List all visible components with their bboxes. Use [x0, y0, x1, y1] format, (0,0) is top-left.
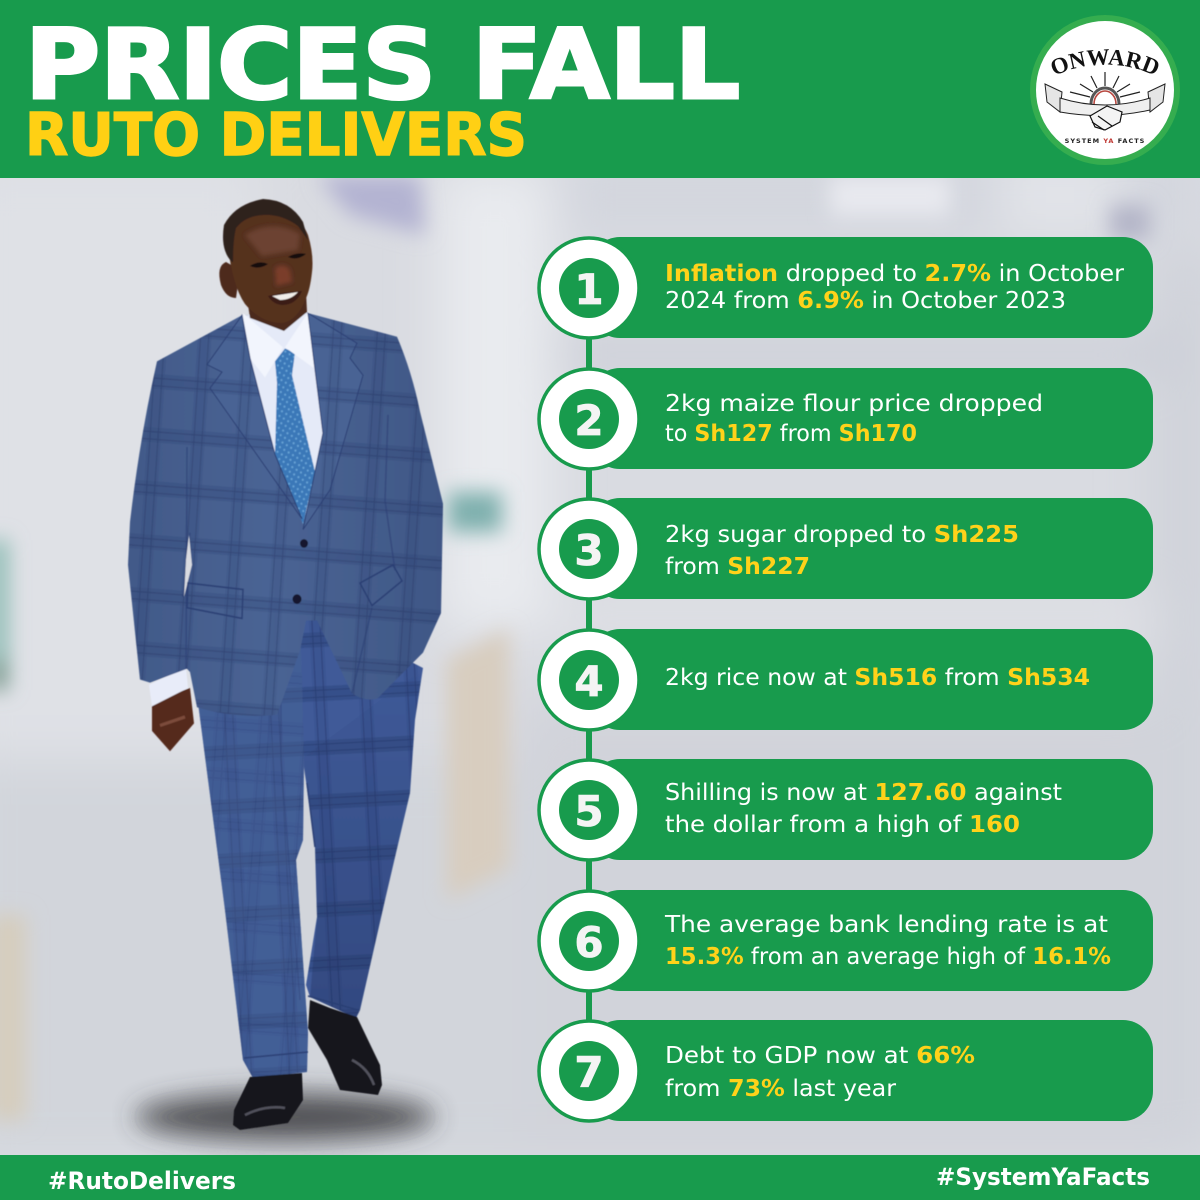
- item 2: maize flour: 2kg maize flour price dropped: [665, 389, 1043, 417]
- item 3: sugar: 2kg sugar dropped to Sh225: [665, 520, 1019, 548]
- eyes: [250, 253, 306, 268]
- ground shadow: [135, 1093, 435, 1141]
- collar: [243, 311, 315, 377]
- item 2: maize flour: to Sh127 from Sh170: [665, 419, 917, 447]
- back shoe: [308, 1000, 382, 1095]
- item 6: lending rate: [539, 890, 1153, 991]
- pocket flaps: [187, 565, 402, 618]
- item 4: rice: [539, 629, 1153, 730]
- front shoe: [233, 1073, 303, 1130]
- upper body: [128, 311, 443, 751]
- item 6: lending rate: 15.3% from an average high of 16.1%: [665, 942, 1111, 970]
- item 7: debt to GDP: [539, 1020, 1153, 1121]
- face: [228, 204, 312, 323]
- item 5: shilling: [539, 759, 1153, 860]
- footer band: [0, 1155, 1200, 1200]
- trousers: [197, 610, 423, 1078]
- arm gap: [184, 535, 192, 597]
- neck: [247, 292, 307, 331]
- ear: [219, 262, 240, 298]
- item 5: shilling: the dollar from a high of 160: [665, 810, 1020, 838]
- item 3: sugar: 3: [574, 526, 604, 575]
- item 4: rice: 2kg rice now at Sh516 from Sh534: [665, 663, 1090, 691]
- item 1: inflation: 2024 from 6.9% in October 2023: [665, 286, 1066, 314]
- item 3: sugar: from Sh227: [665, 552, 810, 580]
- item 2: maize flour: 2: [574, 396, 604, 445]
- subtitle: RUTO DELIVERS: RUTO DELIVERS: [25, 100, 527, 169]
- figure: man walking in blue suit: [128, 199, 443, 1141]
- header band: [0, 0, 1200, 178]
- tie: [275, 349, 315, 524]
- face highlights: [245, 226, 300, 256]
- mouth: [268, 291, 302, 305]
- item 5: shilling: Shilling is now at 127.60 against: [665, 778, 1062, 806]
- hashtag: RutoDelivers: #RutoDelivers: [48, 1167, 236, 1195]
- shirt: [242, 313, 323, 522]
- right lapel: [303, 313, 363, 530]
- item 6: lending rate: The average bank lending rate is at: [664, 910, 1108, 938]
- shirt cuff: [149, 668, 188, 706]
- hair: [223, 199, 308, 262]
- item 5: shilling: 5: [574, 787, 604, 836]
- item 6: lending rate: 6: [574, 918, 604, 967]
- hashtag: SystemYaFacts: #SystemYaFacts: [936, 1163, 1150, 1191]
- item 1: inflation: Inflation dropped to 2.7% in October: [665, 259, 1124, 287]
- jacket: [128, 313, 443, 716]
- item 7: debt to GDP: from 73% last year: [665, 1074, 896, 1102]
- item 4: rice: 4: [574, 657, 604, 706]
- item 1: inflation: [539, 237, 1153, 338]
- title: PRICES FALL: PRICES FALL: [25, 9, 740, 121]
- logo: Onward badge: ONWARD: [1052, 49, 1158, 74]
- item 2: maize flour: [539, 368, 1153, 469]
- item 1: inflation: 1: [574, 265, 604, 314]
- hand: [152, 688, 194, 751]
- jacket buttons: [292, 539, 308, 604]
- logo: Onward badge: SYSTEM YA FACTS: [1065, 137, 1145, 145]
- item 7: debt to GDP: Debt to GDP now at 66%: [665, 1041, 975, 1069]
- logo: Onward badge: [1030, 15, 1180, 165]
- item 7: debt to GDP: 7: [574, 1048, 604, 1097]
- left lapel: [207, 315, 302, 519]
- timeline connector: [586, 300, 592, 1080]
- head: [219, 199, 312, 331]
- item 3: sugar: [539, 498, 1153, 599]
